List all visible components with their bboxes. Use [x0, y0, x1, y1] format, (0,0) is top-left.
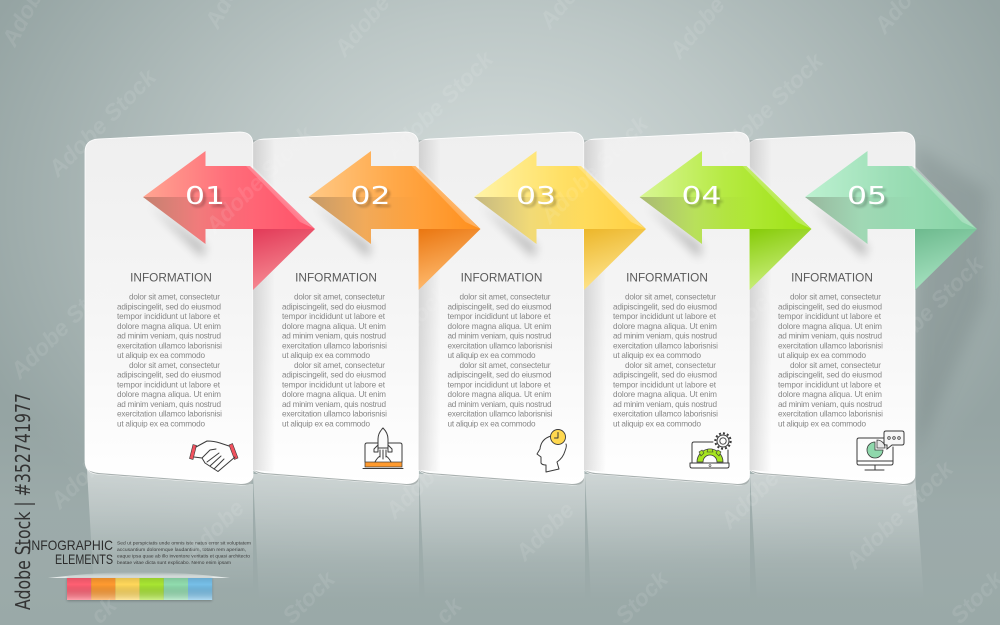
card 3 with arrow	[416, 132, 646, 485]
text block 2: dolor sit amet, consectetur	[294, 361, 385, 370]
text block 3: dolore magna aliqua. Ut enim	[448, 390, 552, 399]
card 2 with arrow	[250, 132, 480, 485]
card 4 with arrow	[582, 132, 812, 485]
text block 4: adipiscingelit, sed do eiusmod	[613, 371, 717, 380]
text block 2: adipiscingelit, sed do eiusmod	[282, 371, 386, 380]
text block 5: exercitation ullamco laborisnisi	[778, 341, 883, 350]
colour palette strip	[48, 572, 230, 601]
text block 4: exercitation ullamco laborisnisi	[613, 341, 718, 350]
panel 5	[747, 132, 987, 485]
text block 5: adipiscingelit, sed do eiusmod	[778, 371, 882, 380]
icon: laptop with gears	[690, 433, 731, 468]
text block 4: tempor incididunt ut labore et	[613, 312, 717, 321]
card 5 with arrow	[747, 132, 987, 485]
text block 2: exercitation ullamco laborisnisi	[282, 341, 387, 350]
text block 2: tempor incididunt ut labore et	[282, 312, 386, 321]
heading: infographic elements: INFOGRAPHIC	[28, 537, 113, 553]
text block 3: ad minim veniam, quis nostrud	[448, 332, 552, 341]
panel 3	[416, 132, 646, 485]
text block 3: tempor incididunt ut labore et	[448, 380, 551, 389]
text block 3: ut aliquip ex ea commodo	[448, 351, 536, 360]
card 5 with arrow: 05	[847, 181, 887, 210]
text block 1: tempor incididunt ut labore et	[117, 312, 221, 321]
text block 4: ad minim veniam, quis nostrud	[613, 400, 717, 409]
card 3 with arrow: 03	[519, 184, 559, 213]
text block 1: ut aliquip ex ea commodo	[117, 351, 205, 360]
text block 2: INFORMATION	[295, 270, 377, 284]
text block 4: dolor sit amet, consectetur	[625, 361, 716, 370]
card 4 with arrow: 04	[682, 181, 722, 210]
text block 3: dolor sit amet, consectetur	[460, 292, 551, 302]
vertical stock credit: Adobe Stock | #352741977	[11, 393, 35, 610]
text block 2: dolore magna aliqua. Ut enim	[282, 322, 386, 331]
card 2 with arrow: 02	[354, 184, 394, 213]
card floor reflections	[87, 470, 924, 600]
text block 3: adipiscingelit, sed do eiusmod	[448, 371, 552, 380]
text block 1: exercitation ullamco laborisnisi	[117, 341, 222, 350]
card 1 with arrow: 01	[185, 181, 225, 210]
text block 3: ad minim veniam, quis nostrud	[448, 400, 552, 409]
text block 1: INFORMATION	[130, 270, 212, 284]
text block 3: ut aliquip ex ea commodo	[448, 420, 536, 428]
watermarks: Adobe Stock	[199, 120, 319, 239]
description text: Sed ut perspiciatis unde omnis iste natus error sit voluptatem	[117, 540, 251, 546]
text block 2: exercitation ullamco laborisnisi	[282, 410, 387, 419]
text block 4: ut aliquip ex ea commodo	[613, 351, 701, 360]
watermarks: Adobe Stock	[664, 280, 784, 399]
text block 3: dolor sit amet, consectetur	[460, 361, 551, 370]
heading: infographic elements: ELEMENTS	[55, 551, 113, 567]
text block 4	[613, 270, 718, 428]
text block 2: dolor sit amet, consectetur	[294, 292, 385, 302]
text block 1: ad minim veniam, quis nostrud	[117, 332, 221, 341]
text block 5: ad minim veniam, quis nostrud	[778, 400, 882, 409]
watermarks: Adobe	[179, 494, 249, 564]
card 1 with arrow	[85, 132, 315, 485]
text block 4: tempor incididunt ut labore et	[613, 380, 717, 389]
text block 5: ad minim veniam, quis nostrud	[778, 332, 882, 341]
text block 4: ad minim veniam, quis nostrud	[613, 332, 717, 341]
text block 4: dolore magna aliqua. Ut enim	[613, 322, 717, 331]
card 4 with arrow: 04	[684, 184, 724, 213]
watermarks: Adobe Stock	[534, 110, 654, 229]
text block 5: dolor sit amet, consectetur	[790, 292, 881, 302]
text block 3: adipiscingelit, sed do eiusmod	[448, 302, 552, 311]
text block 1: dolor sit amet, consectetur	[129, 292, 220, 302]
icon: rocket launching from laptop	[363, 428, 403, 468]
text block 1: exercitation ullamco laborisnisi	[117, 410, 222, 419]
text block 1: dolore magna aliqua. Ut enim	[117, 322, 221, 331]
text block 3	[448, 270, 553, 428]
watermarks: Adobe Stock	[379, 45, 499, 164]
text block 2: ad minim veniam, quis nostrud	[282, 332, 386, 341]
text block 1: ad minim veniam, quis nostrud	[117, 400, 221, 409]
text block 1: tempor incididunt ut labore et	[117, 380, 221, 389]
text block 1	[117, 270, 222, 428]
text block 1: dolore magna aliqua. Ut enim	[117, 390, 221, 399]
icon: monitor with pie chart and speech bubble	[857, 431, 904, 470]
description text: accusantium doloremque laudantium, totam rem aperiam,	[117, 547, 246, 553]
text block 2: adipiscingelit, sed do eiusmod	[282, 302, 386, 311]
watermarks: Adobe Stock	[839, 455, 959, 574]
text block 3: dolore magna aliqua. Ut enim	[448, 322, 552, 331]
text block 4: dolore magna aliqua. Ut enim	[613, 390, 717, 399]
watermarks: Adobe Stock	[714, 415, 834, 534]
watermarks: Adobe Stock	[4, 265, 124, 384]
watermarks: Adobe Stock	[379, 405, 499, 524]
text block 2: ad minim veniam, quis nostrud	[282, 400, 386, 409]
description text: eaque ipsa quae ab illo inventore veritatis et quasi architecto	[117, 554, 250, 560]
heading: infographic elements	[28, 537, 113, 567]
text block 5: INFORMATION	[791, 270, 873, 284]
panel 2	[250, 132, 480, 485]
description text: beatae vitae dicta sunt explicabo. Nemo enim ipsam	[117, 560, 231, 566]
watermarks: Adobe Stock	[869, 250, 989, 369]
text block 1: dolor sit amet, consectetur	[129, 361, 220, 370]
watermarks: Adobe Stock	[334, 280, 454, 399]
text block 4: INFORMATION	[626, 270, 708, 284]
text block 4: exercitation ullamco laborisnisi	[613, 410, 718, 419]
text block 5: tempor incididunt ut labore et	[778, 380, 882, 389]
card 2 with arrow: 02	[350, 181, 390, 210]
text block 3: INFORMATION	[461, 270, 542, 284]
text block 1: adipiscingelit, sed do eiusmod	[117, 302, 221, 311]
text block 1: adipiscingelit, sed do eiusmod	[117, 371, 221, 380]
card 1 with arrow: 01	[188, 184, 228, 213]
text block 5: dolore magna aliqua. Ut enim	[778, 322, 882, 331]
text block 2: dolore magna aliqua. Ut enim	[282, 390, 386, 399]
text block 2: ut aliquip ex ea commodo	[282, 420, 370, 428]
panel 1	[85, 132, 315, 485]
card 5 with arrow: 05	[850, 184, 890, 213]
text block 4: ut aliquip ex ea commodo	[613, 420, 701, 428]
text block 2	[282, 270, 387, 428]
icon: handshake	[190, 441, 238, 472]
text block 5	[778, 270, 883, 428]
icon: head with clock	[537, 430, 566, 472]
watermarks: Adobe	[509, 496, 579, 566]
text block 3: exercitation ullamco laborisnisi	[448, 410, 553, 419]
watermarks: Adobe Stock	[42, 63, 162, 182]
text block 2: tempor incididunt ut labore et	[282, 380, 386, 389]
watermarks: Adobe Stock	[709, 47, 829, 166]
text block 5: tempor incididunt ut labore et	[778, 312, 882, 321]
text block 4: dolor sit amet, consectetur	[625, 292, 716, 302]
text block 5: ut aliquip ex ea commodo	[778, 351, 866, 360]
text block 5: adipiscingelit, sed do eiusmod	[778, 302, 882, 311]
panel 4	[582, 132, 812, 485]
text block 4: adipiscingelit, sed do eiusmod	[613, 302, 717, 311]
text block 3: exercitation ullamco laborisnisi	[448, 341, 553, 350]
text block 3: tempor incididunt ut labore et	[448, 312, 551, 321]
text block 2: ut aliquip ex ea commodo	[282, 351, 370, 360]
text block 5: dolore magna aliqua. Ut enim	[778, 390, 882, 399]
card 3 with arrow: 03	[516, 181, 556, 210]
watermarks: Adobe Stock	[44, 395, 164, 514]
text block 1: ut aliquip ex ea commodo	[117, 420, 205, 428]
description text	[117, 540, 251, 566]
text block 5: dolor sit amet, consectetur	[790, 361, 881, 370]
text block 5: ut aliquip ex ea commodo	[778, 420, 866, 428]
text block 5: exercitation ullamco laborisnisi	[778, 410, 883, 419]
